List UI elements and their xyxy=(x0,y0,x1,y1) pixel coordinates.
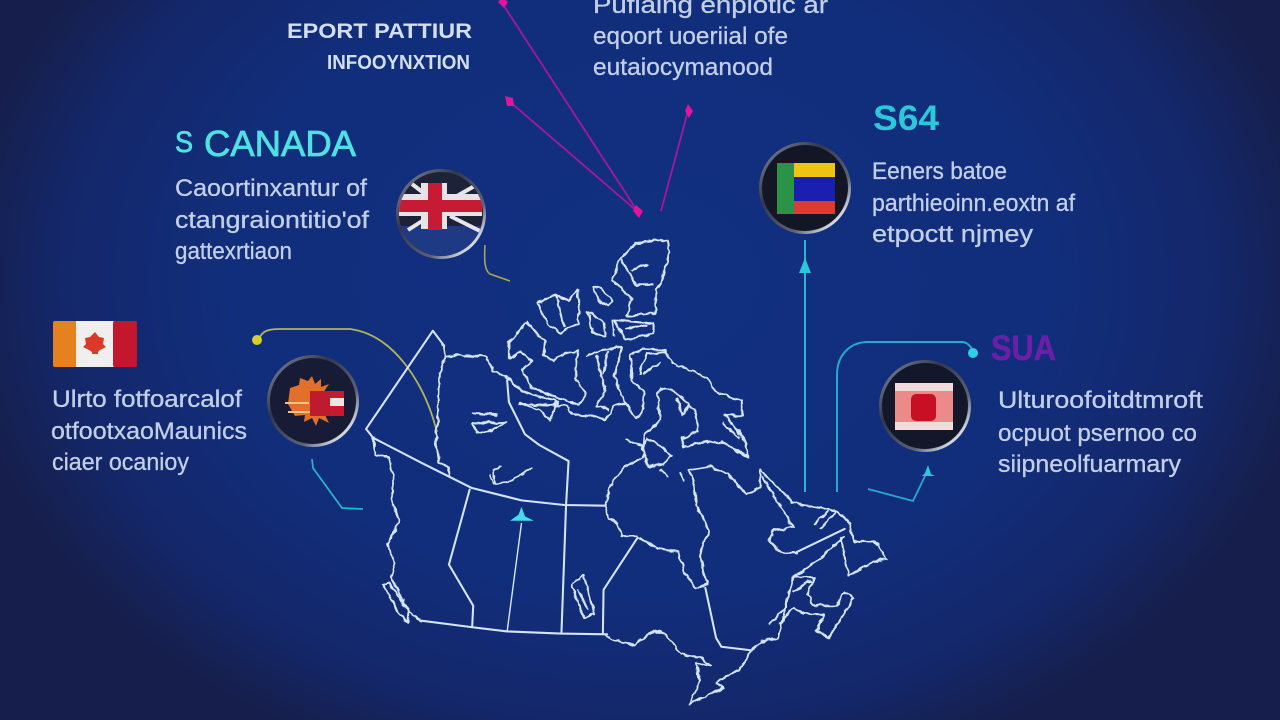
text block: Canada: Caoortinxantur of xyxy=(175,175,367,202)
Labrador border xyxy=(796,529,845,552)
text block: right bottom: siipneolfuarmary xyxy=(998,451,1181,478)
cyan arrow up xyxy=(799,240,811,492)
text block: top centre xyxy=(593,0,828,81)
text block: left: ciaer ocanioy xyxy=(52,449,189,476)
Manitoba Ontario border xyxy=(603,538,637,634)
flag: Canada style xyxy=(53,321,137,367)
text block: right bottom: ocpuot psernoo co xyxy=(998,420,1197,447)
text block: right bottom xyxy=(998,387,1203,478)
title: export partner information: EPORT PATTIUR xyxy=(287,20,472,43)
small yellow connector xyxy=(485,245,510,281)
icon: tricolour flag badge xyxy=(759,142,851,234)
heading: Canada: CANADA xyxy=(204,123,356,164)
title: export partner information: INFOOYNXTION xyxy=(327,52,470,74)
60th parallel xyxy=(373,438,605,506)
Alberta Saskatchewan border xyxy=(507,524,521,631)
map of Canada outline xyxy=(366,240,887,704)
title: export partner information xyxy=(287,20,472,74)
text block: right bottom: Ulturoofoitdtmroft xyxy=(998,387,1203,414)
heading: Canada: S xyxy=(175,126,193,159)
cyan map marker arrow xyxy=(510,507,534,521)
stat: $64: S64 xyxy=(873,99,940,138)
southern border xyxy=(421,621,607,634)
Ontario Quebec border xyxy=(705,588,752,650)
Nunavut boundary xyxy=(507,381,569,634)
text block: Canada: gattexrtiaon xyxy=(175,238,292,265)
text block: top centre: eqoort uoeriial ofe xyxy=(593,23,788,50)
coastlines with organic wiggle xyxy=(373,240,887,704)
heading: SUA: SUA xyxy=(991,329,1056,368)
icon: red square flag badge xyxy=(879,360,971,452)
text block: right top: Eeners batoe xyxy=(872,158,1007,185)
small cyan arrow xyxy=(868,465,935,501)
text block: left xyxy=(51,386,247,476)
text block: Canada xyxy=(175,175,369,265)
Yukon triangle xyxy=(366,331,444,438)
text block: top centre: eutaiocymanood xyxy=(593,54,773,81)
text block: Canada: ctangraiontitio'of xyxy=(175,207,369,234)
small cyan connector xyxy=(312,459,363,509)
icon: burst flag badge xyxy=(267,355,359,447)
text block: left: Ulrto fotfoarcalof xyxy=(52,386,242,413)
icon: UK style flag badge xyxy=(396,169,486,260)
BC Alberta border xyxy=(449,490,473,627)
text block: right top: etpoctt njmey xyxy=(872,221,1033,248)
text block: left: otfootxaoMaunics xyxy=(51,418,247,445)
yellow connector with dot xyxy=(252,329,437,432)
cyan rounded connector with dot xyxy=(837,342,978,492)
text block: right top: parthieoinn.eoxtn af xyxy=(872,190,1075,217)
text block: right top xyxy=(872,158,1075,248)
magenta connector lines xyxy=(498,0,693,218)
